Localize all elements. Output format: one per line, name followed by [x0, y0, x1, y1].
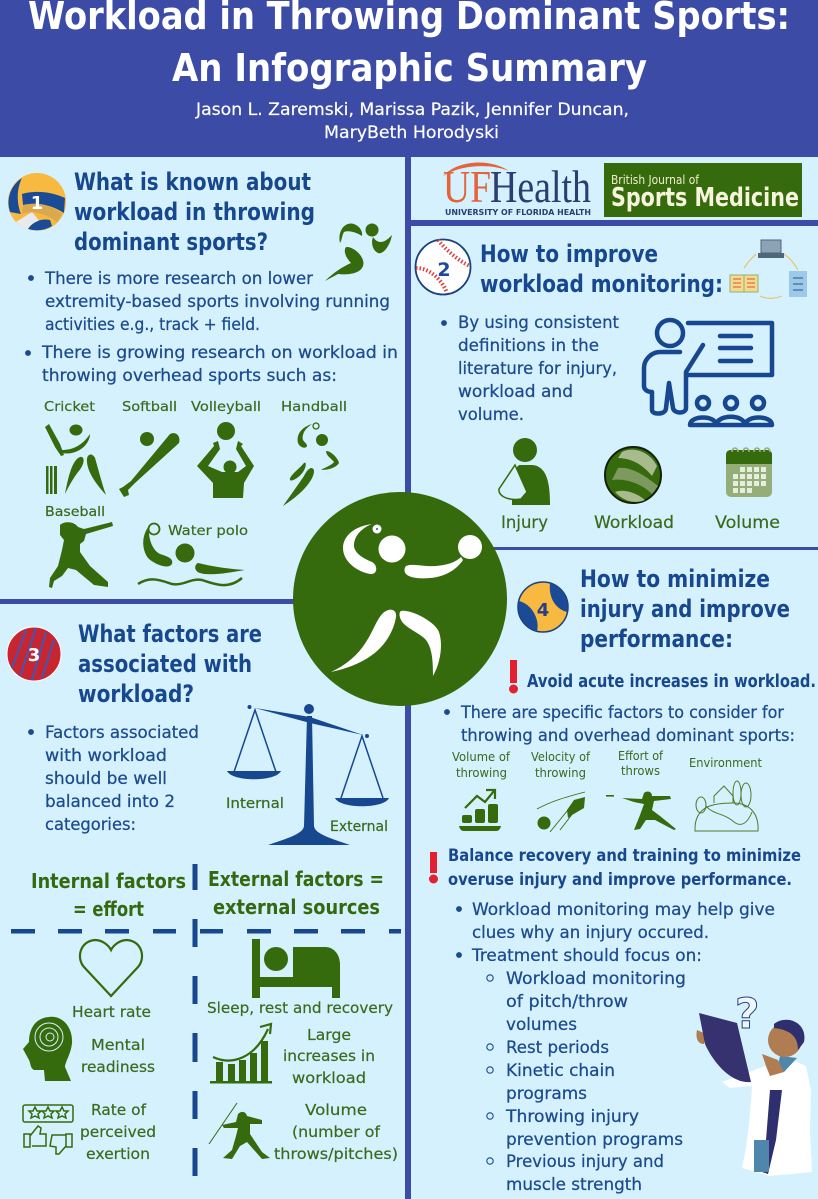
- icon: volume chart: [459, 790, 501, 831]
- panel 1: what is known: [8, 168, 398, 588]
- icon labels: [501, 513, 780, 532]
- bullet text: volume.: [458, 405, 524, 424]
- bullet text: By using consistent: [458, 313, 620, 332]
- bullets: There is growing research on workload in: [41, 343, 398, 362]
- external labels: Volume: [305, 1101, 367, 1119]
- icon: red exclamation 1: [509, 660, 518, 694]
- header banner: [0, 0, 818, 157]
- heading: workload?: [78, 680, 194, 708]
- logo: British Journal of Sports Medicine: [604, 163, 802, 217]
- icon: volleyball player: [197, 422, 254, 498]
- logo: British Journal of Sports Medicine: British Journal of: [611, 173, 700, 187]
- external labels: workload: [292, 1069, 366, 1087]
- treatment list: prevention programs: [506, 1130, 683, 1149]
- external labels: Sleep, rest and recovery: [207, 999, 393, 1017]
- heading: [580, 565, 790, 653]
- small factor labels: throwing: [456, 766, 507, 780]
- icon: cricket: [45, 424, 106, 495]
- icon: teacher at board: [644, 320, 772, 425]
- treatment list: Workload monitoring may help give: [472, 900, 775, 919]
- panel 4: minimize injury: [429, 565, 816, 1194]
- icon: environment globe: [695, 781, 758, 831]
- external factors heading: [208, 867, 384, 919]
- small factor labels: Velocity of: [531, 750, 591, 764]
- bullets: extremity-based sports involving running: [45, 292, 390, 311]
- internal factors heading: = effort: [73, 897, 144, 921]
- scale labels: External: [330, 819, 388, 835]
- bullet text: [444, 703, 795, 745]
- icon: rising bars: [210, 1024, 272, 1084]
- icon: injury sling: [499, 438, 550, 505]
- internal labels: [72, 1003, 156, 1163]
- icon: volleyball 1: [8, 173, 66, 231]
- dashed grid: [11, 864, 401, 1176]
- bullet text: with workload: [45, 746, 167, 765]
- bullet text: throwing and overhead dominant sports:: [461, 726, 795, 745]
- icon: heart: [80, 940, 142, 996]
- small factor labels: [452, 749, 762, 780]
- bullet text: should be well: [45, 769, 167, 788]
- sport labels: Water polo: [168, 523, 248, 539]
- authors: [195, 100, 629, 143]
- icon: handball player: [283, 423, 339, 506]
- heading: What is known about: [74, 168, 311, 196]
- heading: [78, 620, 262, 708]
- bullet text: [28, 723, 199, 834]
- title: An Infographic Summary: [172, 46, 647, 90]
- icon labels: Workload: [594, 513, 674, 532]
- icon: cricket ball 3: [7, 627, 61, 681]
- logo: UF Health: Health: [490, 161, 591, 212]
- logo: UF Health: [443, 161, 591, 217]
- logo: UF Health: UF: [443, 161, 491, 212]
- icon: doctor with question mark: ?: [735, 989, 759, 1038]
- bullet text: workload and: [458, 382, 573, 401]
- icon: javelin thrower: [209, 1103, 270, 1159]
- small factor labels: Environment: [689, 756, 762, 770]
- icon: softball 4: 4: [537, 600, 549, 621]
- small factor labels: Effort of: [618, 749, 664, 763]
- panel 2: improve monitoring: [416, 240, 807, 532]
- bullet text: categories:: [45, 815, 136, 834]
- icon: doctor with question mark: [696, 989, 812, 1176]
- icon: cricket ball 3: 3: [28, 645, 40, 666]
- bullet text: definitions in the: [458, 336, 599, 355]
- sport labels: [44, 399, 347, 539]
- small factor labels: throwing: [535, 766, 586, 780]
- treatment list: Workload monitoring: [506, 969, 686, 988]
- internal labels: Rate of: [91, 1101, 147, 1119]
- scale labels: [226, 796, 388, 835]
- internal labels: Heart rate: [72, 1003, 151, 1021]
- treatment list: of pitch/throw: [506, 992, 628, 1011]
- heading: How to improve: [480, 240, 658, 268]
- bullets: activities e.g., track + field.: [45, 315, 260, 334]
- treatment list: Previous injury and: [506, 1152, 664, 1171]
- heading: [74, 168, 315, 256]
- icon labels: Volume: [715, 513, 780, 532]
- logo: UF Health: UNIVERSITY OF FLORIDA HEALTH: [445, 208, 591, 217]
- icon: red exclamation 2: [429, 852, 438, 884]
- internal factors heading: [31, 869, 186, 921]
- icon: bed: [252, 939, 340, 998]
- treatment list: Throwing injury: [505, 1107, 639, 1126]
- heading: dominant sports?: [74, 228, 268, 256]
- icon: disc thrower: [606, 792, 676, 830]
- heading: workload monitoring:: [480, 270, 723, 298]
- internal labels: perceived: [80, 1123, 156, 1141]
- icon: balance scale: [227, 704, 389, 845]
- icon: water polo: [138, 524, 245, 585]
- authors: MaryBeth Horodyski: [324, 123, 499, 143]
- bullet text: Factors associated: [45, 723, 199, 742]
- treatment list: clues why an injury occured.: [472, 923, 709, 942]
- scale labels: Internal: [226, 796, 284, 812]
- bullet text: There are specific factors to consider for: [460, 703, 784, 722]
- external labels: increases in: [283, 1047, 375, 1065]
- heading: associated with: [78, 650, 252, 678]
- title: [28, 0, 790, 90]
- heading: performance:: [580, 625, 733, 653]
- bullets: [25, 269, 398, 385]
- icon: rating stars and thumbs: [23, 1105, 73, 1154]
- authors: Jason L. Zaremski, Marissa Pazik, Jennifer Duncan,: [195, 100, 629, 120]
- internal labels: readiness: [81, 1058, 155, 1076]
- callout: balance recovery: [448, 846, 801, 889]
- icon: head spiral: [23, 1017, 72, 1081]
- bullet text: literature for injury,: [458, 359, 617, 378]
- bullets: throwing overhead sports such as:: [42, 366, 337, 385]
- heading: What factors are: [78, 620, 262, 648]
- heading: [480, 240, 723, 298]
- treatment list: Treatment should focus on:: [471, 946, 702, 965]
- treatment list: Rest periods: [506, 1038, 609, 1057]
- sport labels: Softball: [122, 399, 177, 415]
- bullets: There is more research on lower: [44, 269, 313, 288]
- treatment list: Kinetic chain: [506, 1061, 615, 1080]
- treatment list: volumes: [506, 1015, 577, 1034]
- internal labels: exertion: [86, 1145, 150, 1163]
- icon: calendar: [726, 448, 772, 497]
- icon: study cycle: [730, 240, 807, 298]
- treatment list: muscle strength: [506, 1175, 642, 1194]
- small factor labels: throws: [621, 764, 660, 778]
- external labels: throws/pitches): [274, 1145, 398, 1163]
- icon: workload ball: [605, 447, 661, 503]
- external factors heading: External factors =: [208, 867, 384, 891]
- sport labels: Cricket: [44, 399, 95, 415]
- icon: runner: [325, 224, 392, 281]
- icon: baseball batter: [49, 522, 113, 588]
- icon: softball bat: [119, 432, 179, 497]
- internal labels: Mental: [91, 1036, 145, 1054]
- treatment list: programs: [506, 1084, 587, 1103]
- sport labels: Baseball: [45, 504, 105, 520]
- icon: baseball 2: 2: [437, 259, 451, 281]
- icon: fast ball: [537, 792, 585, 832]
- heading: workload in throwing: [74, 198, 315, 226]
- external labels: Large: [307, 1026, 351, 1044]
- logos: [443, 161, 802, 217]
- external labels: (number of: [292, 1123, 381, 1141]
- icon: softball 4: [518, 582, 568, 632]
- bullet text: [441, 313, 620, 424]
- heading: How to minimize: [580, 565, 770, 593]
- external factors heading: external sources: [213, 895, 380, 919]
- bullet text: balanced into 2: [45, 792, 175, 811]
- centre circle: thrower: [293, 492, 507, 706]
- sport labels: Volleyball: [191, 399, 261, 415]
- icon labels: Injury: [501, 513, 548, 532]
- icon: baseball 2: [416, 240, 470, 294]
- small factor labels: Volume of: [452, 750, 511, 764]
- internal factors heading: Internal factors: [31, 869, 186, 893]
- icon: volleyball 1: 1: [31, 193, 43, 214]
- external labels: [207, 999, 398, 1163]
- sport labels: Handball: [281, 399, 347, 415]
- panel 3: factors: [7, 620, 401, 1176]
- treatment list: [456, 900, 775, 1194]
